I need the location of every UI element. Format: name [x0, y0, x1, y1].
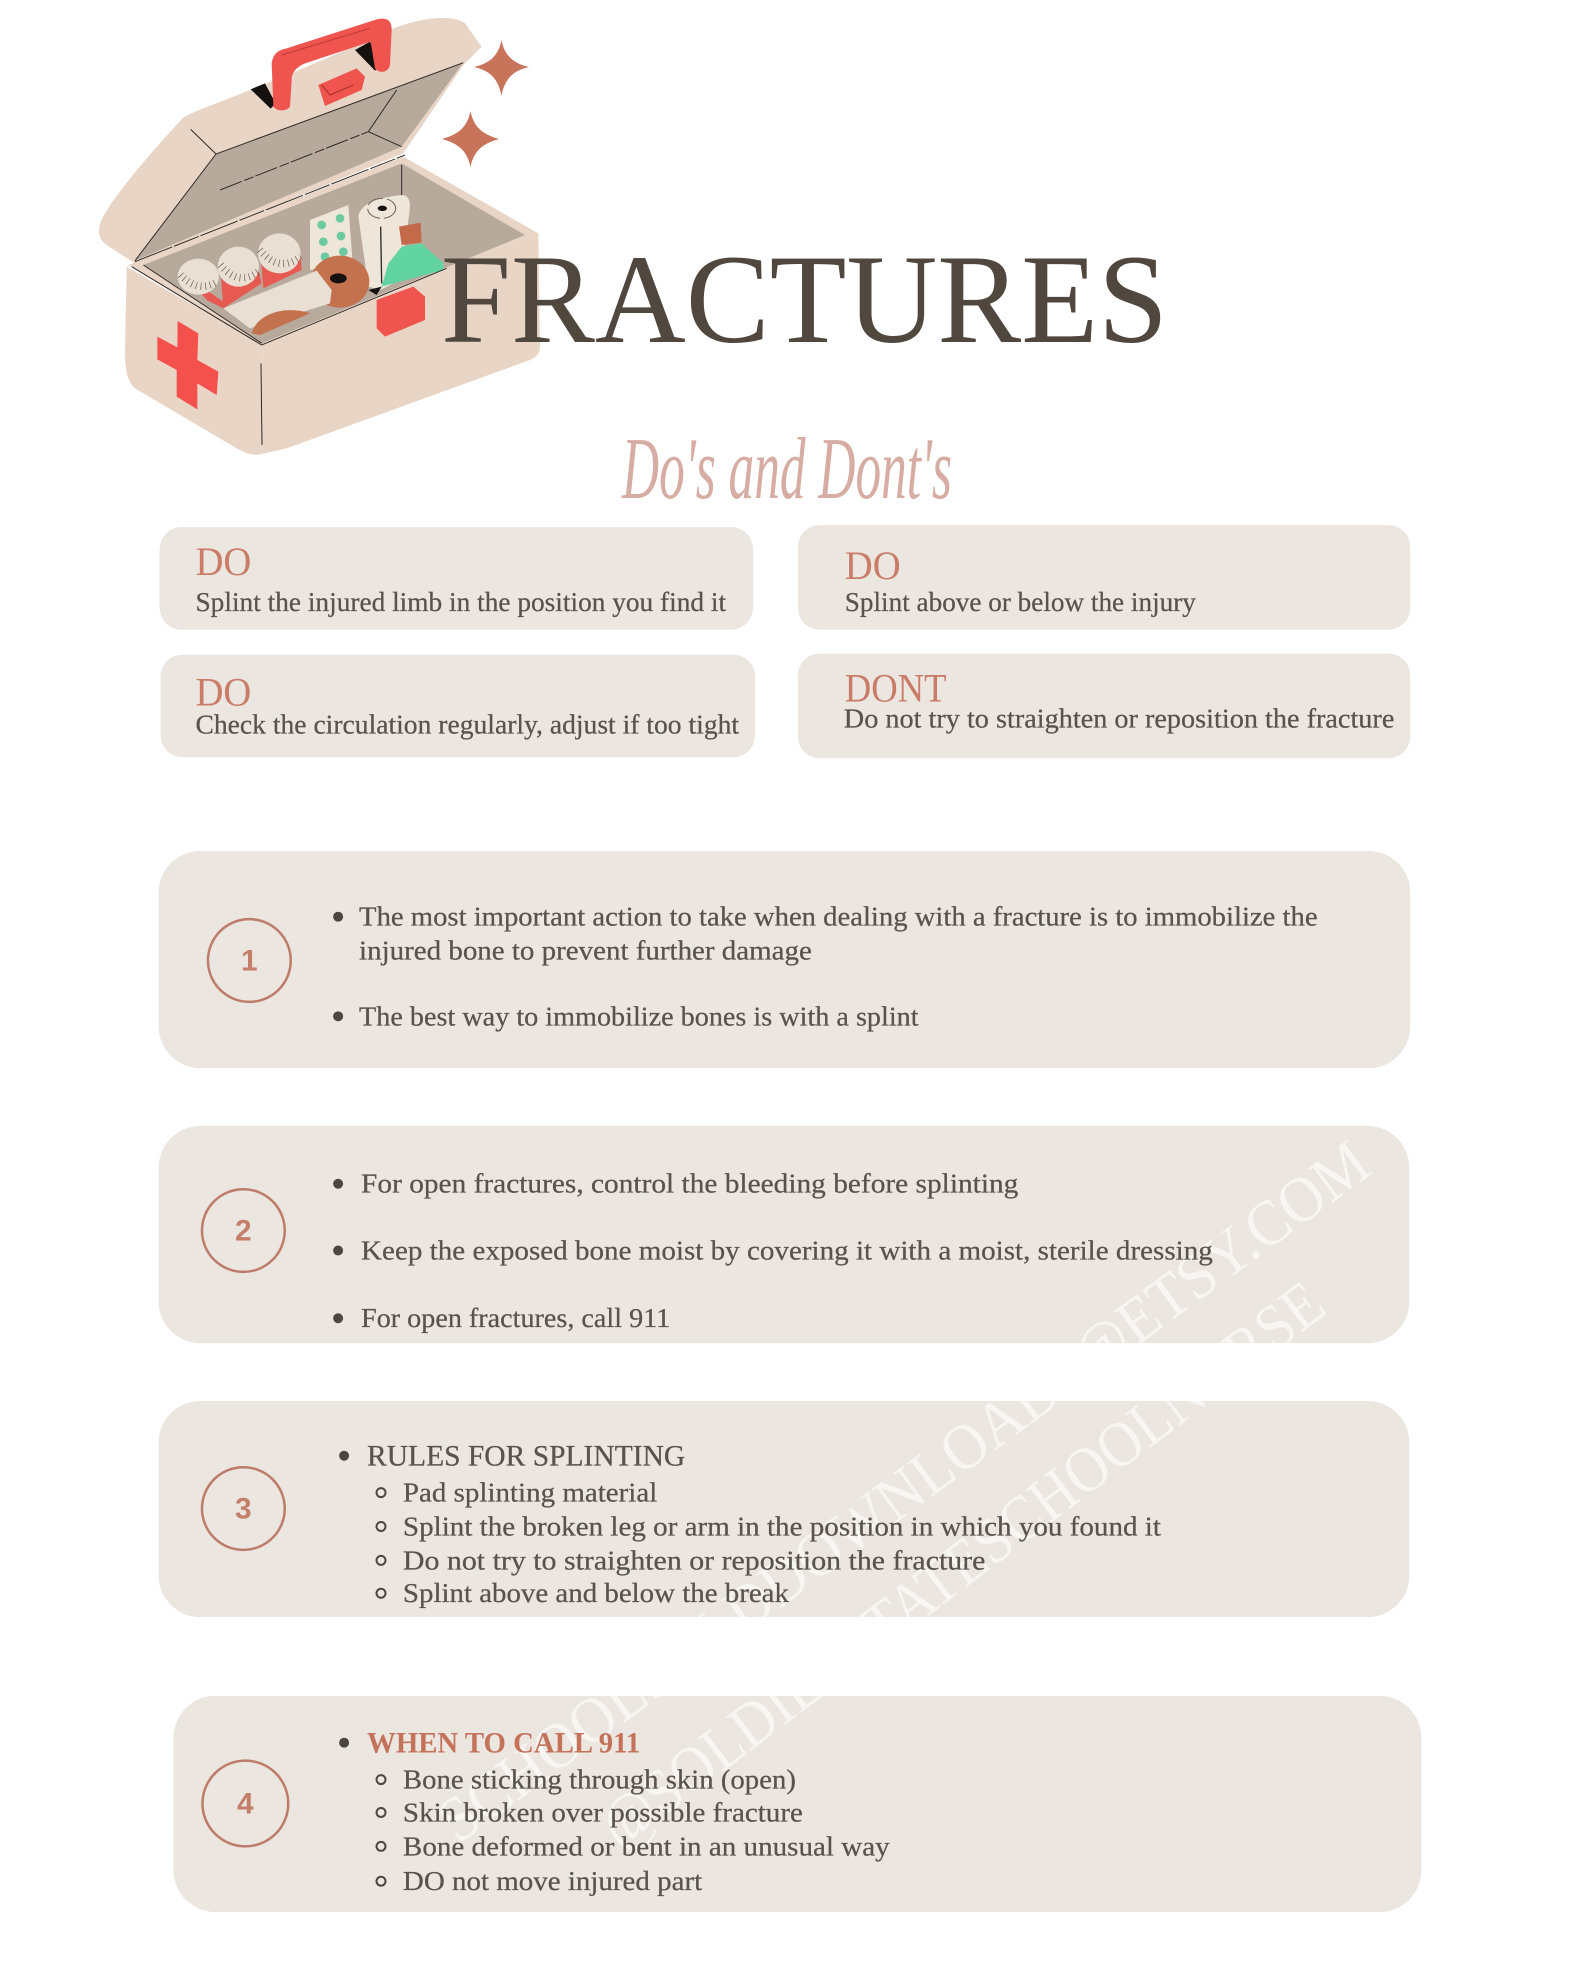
- step 4 item 1: Bone sticking through skin (open): [403, 1765, 796, 1796]
- watermark: SCHOOLSOLDDOWNLOADS@ETSY.COM: [424, 1126, 1383, 1856]
- step 3 item 2: Splint the broken leg or arm in the position in which you found it: [403, 1511, 1161, 1542]
- step 4 item 2: Skin broken over possible fracture: [403, 1797, 803, 1828]
- step 4 item 3: Bone deformed or bent in an unusual way: [403, 1831, 890, 1862]
- do text 3: Check the circulation regularly, adjust if too tight: [195, 709, 739, 740]
- number badge 4: [202, 1761, 288, 1846]
- do heading 2: DO: [845, 543, 901, 588]
- do heading 1: DO: [195, 539, 251, 584]
- dont heading: DONT: [845, 665, 947, 710]
- kit lid: [99, 18, 482, 263]
- step 3 heading: RULES FOR SPLINTING: [367, 1440, 685, 1473]
- icon: sparkle upper: [474, 40, 529, 96]
- icon: first aid kit: [99, 18, 540, 455]
- step 2 bullet 2: Keep the exposed bone moist by covering it with a moist, sterile dressing: [361, 1235, 1213, 1266]
- step 3 item 1: Pad splinting material: [403, 1478, 658, 1509]
- panel: step 3: [159, 1401, 1409, 1617]
- red pouch: [377, 287, 425, 337]
- panel: step 1: [159, 851, 1410, 1068]
- kit handle: [251, 19, 392, 110]
- number badge 1: 1: [241, 945, 258, 977]
- panel text blocks: [333, 1169, 1213, 1897]
- panel: do card 1: [160, 527, 753, 630]
- step 3 text: [339, 1440, 1161, 1609]
- step 1 bullet 1: The most important action to take when dealing with a fracture is to immobilize the: [359, 902, 1318, 933]
- subtitle: Do's and Dont's: [621, 421, 952, 518]
- number badge 3: [202, 1467, 285, 1550]
- step 1 bullet 2: The best way to immobilize bones is with a splint: [359, 1001, 919, 1032]
- do text 1: Splint the injured limb in the position you find it: [195, 587, 726, 618]
- number badge 4: 4: [237, 1787, 254, 1820]
- panel: step 4: [174, 1696, 1421, 1912]
- dont text: Do not try to straighten or reposition the fracture: [844, 703, 1394, 734]
- kit body: [125, 157, 540, 455]
- red cross: [157, 321, 218, 409]
- panel: do card 3: [161, 655, 755, 757]
- step 1 bullet 1 continued: injured bone to prevent further damage: [359, 936, 812, 967]
- icon: sparkle lower: [442, 111, 499, 167]
- step 4 heading: WHEN TO CALL 911: [367, 1727, 640, 1760]
- kit contents: [178, 195, 443, 335]
- step 2 text: [333, 1169, 1213, 1334]
- panel: step 2: [159, 1126, 1409, 1343]
- step 3 item 3: Do not try to straighten or reposition the fracture: [403, 1545, 985, 1576]
- step 3 item 4: Splint above and below the break: [403, 1578, 789, 1609]
- watermark: @SOLDIERSTATESCHOOLNURSE: [586, 1267, 1337, 1861]
- step 2 bullet 3: For open fractures, call 911: [361, 1303, 670, 1334]
- do heading 3: DO: [195, 669, 251, 714]
- do text 2: Splint above or below the injury: [845, 587, 1196, 618]
- panel: do card 2: [798, 525, 1410, 630]
- step 2 bullet 1: For open fractures, control the bleeding before splinting: [361, 1169, 1018, 1200]
- number badge 2: [202, 1189, 285, 1272]
- number badge 3: 3: [235, 1493, 252, 1526]
- step 4 item 4: DO not move injured part: [403, 1866, 702, 1897]
- panel: dont card: [798, 654, 1410, 758]
- main content: [159, 525, 1421, 1912]
- number badge 2: 2: [235, 1215, 252, 1248]
- title: FRACTURES: [441, 230, 1168, 370]
- number badge 1: [208, 919, 291, 1002]
- step 4 text: [339, 1727, 890, 1897]
